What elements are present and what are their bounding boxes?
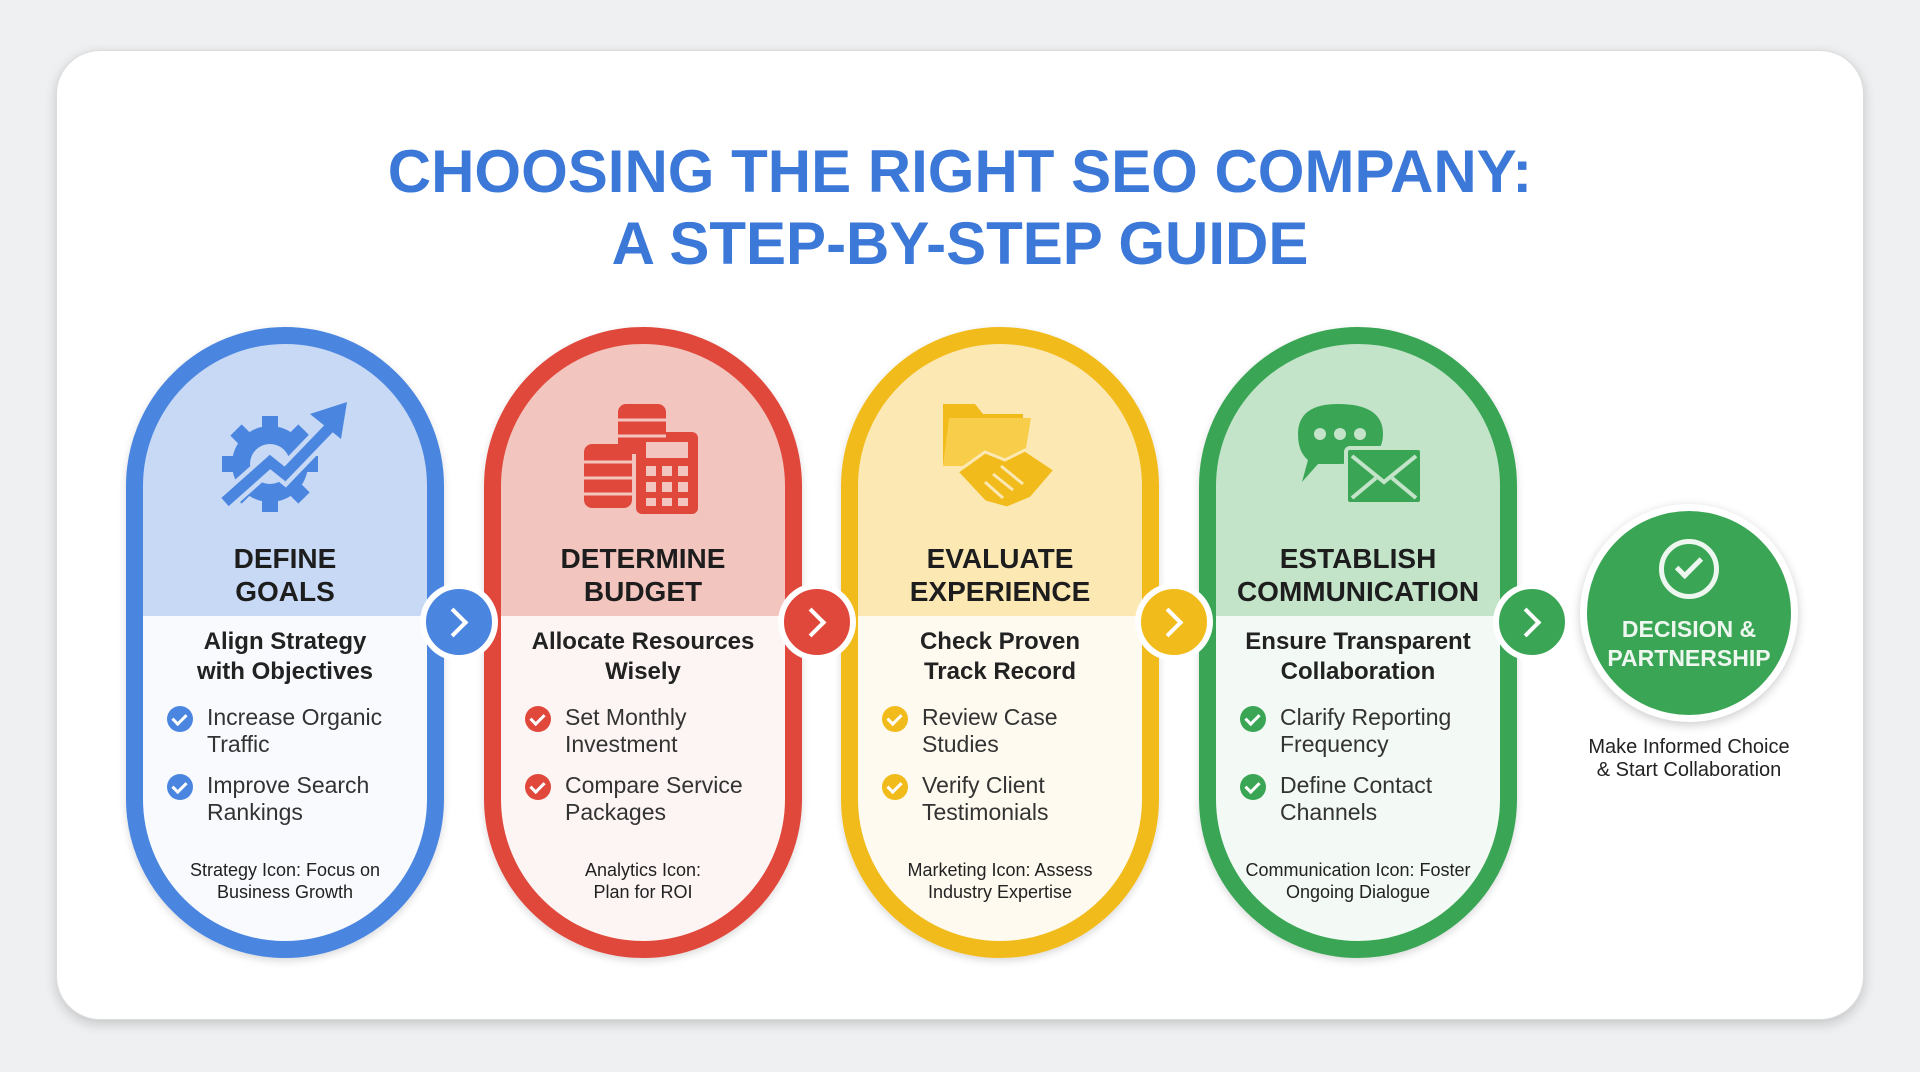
arrow: [1493, 583, 1571, 661]
label: PARTNERSHIP: [1607, 645, 1771, 671]
subtitle: Check Proven: [920, 628, 1080, 655]
footer note: Marketing Icon: Assess: [907, 860, 1093, 880]
footer note: [1245, 860, 1471, 902]
panel: define goals: [126, 327, 444, 958]
bullets: [167, 704, 382, 825]
subtitle: Ensure Transparent: [1245, 628, 1471, 655]
decision caption: & Start Collaboration: [1597, 759, 1781, 781]
footer note: Communication Icon: Foster: [1245, 860, 1471, 880]
bullets: Clarify Reporting: [1280, 704, 1451, 730]
subtitle: Wisely: [605, 658, 681, 685]
heading: COMMUNICATION: [1237, 576, 1479, 607]
bullets: Testimonials: [922, 799, 1049, 825]
subtitle: with Objectives: [197, 658, 373, 685]
decision circle: [1580, 504, 1798, 722]
bullets: [882, 704, 1058, 825]
footer note: [907, 860, 1093, 902]
footer note: Plan for ROI: [593, 882, 693, 902]
subtitle: Collaboration: [1281, 658, 1435, 685]
footer note: [585, 860, 701, 902]
bullets: Increase Organic: [207, 704, 382, 730]
bullets: Packages: [565, 799, 666, 825]
bullets: Set Monthly: [565, 704, 686, 730]
footer note: Strategy Icon: Focus on: [190, 860, 380, 880]
heading: EXPERIENCE: [910, 576, 1090, 607]
heading: [910, 543, 1090, 607]
heading: BUDGET: [584, 576, 702, 607]
title: A STEP-BY-STEP GUIDE: [612, 210, 1308, 277]
footer note: Business Growth: [217, 882, 353, 902]
icon: chat and envelope: [1298, 404, 1420, 502]
decision caption: [1588, 736, 1790, 781]
heading: DEFINE: [234, 543, 336, 574]
heading: [234, 543, 336, 607]
arrow: [420, 583, 498, 661]
bullets: Define Contact: [1280, 772, 1432, 798]
icon: folder and handshake: [943, 404, 1053, 506]
bullets: Channels: [1280, 799, 1377, 825]
heading: EVALUATE: [927, 543, 1073, 574]
title: [388, 138, 1532, 277]
footer note: [190, 860, 380, 902]
subtitle: Allocate Resources: [532, 628, 754, 655]
bullets: [1240, 704, 1451, 825]
panel: evaluate experience: [841, 327, 1159, 958]
arrow: [778, 583, 856, 661]
bullets: Frequency: [1280, 731, 1389, 757]
icon: check circle: [1659, 539, 1719, 599]
heading: GOALS: [235, 576, 335, 607]
arrow: [1135, 583, 1213, 661]
bullets: Review Case: [922, 704, 1058, 730]
footer note: Industry Expertise: [928, 882, 1072, 902]
bullets: Traffic: [207, 731, 270, 757]
subtitle: [197, 628, 373, 685]
bullets: Verify Client: [922, 772, 1045, 798]
heading: DETERMINE: [561, 543, 725, 574]
icon: gear with arrow: [221, 402, 347, 512]
heading: [561, 543, 725, 607]
footer note: Ongoing Dialogue: [1286, 882, 1430, 902]
label: DECISION &: [1622, 616, 1756, 642]
icon: coins and calculator: [584, 404, 698, 514]
subtitle: [920, 628, 1080, 685]
bullets: Improve Search: [207, 772, 369, 798]
bullets: Studies: [922, 731, 999, 757]
bullets: Compare Service: [565, 772, 743, 798]
subtitle: [532, 628, 754, 685]
panel: establish communication: [1199, 327, 1517, 958]
subtitle: [1245, 628, 1471, 685]
subtitle: Track Record: [924, 658, 1076, 685]
title: CHOOSING THE RIGHT SEO COMPANY:: [388, 138, 1532, 205]
heading: [1237, 543, 1479, 607]
bullets: [525, 704, 743, 825]
bullets: Rankings: [207, 799, 303, 825]
decision caption: Make Informed Choice: [1588, 736, 1790, 758]
label: [1607, 616, 1771, 671]
bullets: Investment: [565, 731, 678, 757]
panel: determine budget: [484, 327, 802, 958]
subtitle: Align Strategy: [204, 628, 366, 655]
heading: ESTABLISH: [1280, 543, 1436, 574]
footer note: Analytics Icon:: [585, 860, 701, 880]
